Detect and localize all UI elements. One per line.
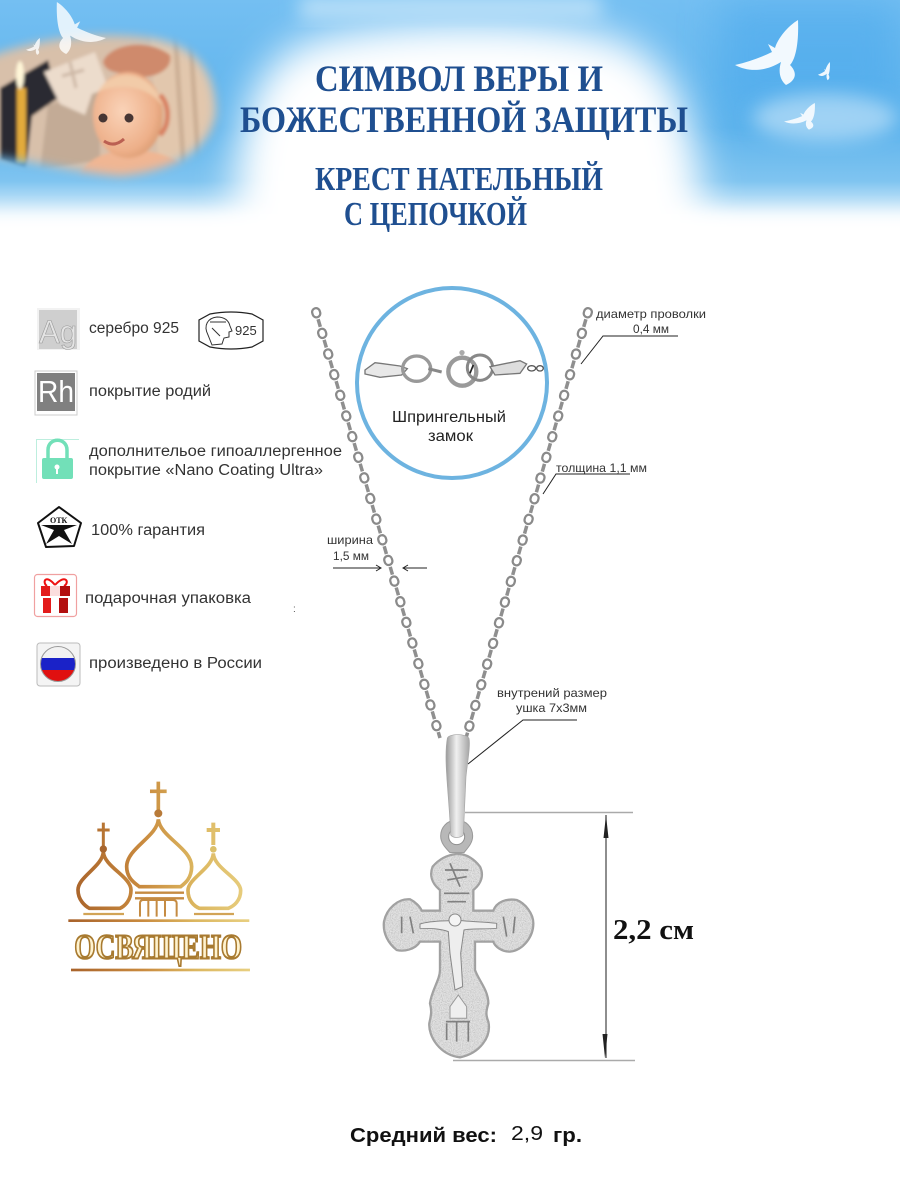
text: gift wrapping: подарочная упаковка [85,590,251,607]
cross pendant [384,735,533,1057]
logo: consecrated domes [68,782,250,971]
icon: green lock [36,440,79,483]
text: guarantee: 100% гарантия [91,522,205,539]
average weight: гр. [553,1125,582,1147]
cross body [384,854,533,1057]
title: БОЖЕСТВЕННОЙ ЗАЩИТЫ [240,99,688,141]
crosses [97,782,220,853]
dimension: cross height [453,812,694,1060]
bail [446,735,469,837]
drum and base line [68,893,249,922]
callout: chain width: 1,5 мм [333,549,369,563]
callout: chain width [327,533,427,571]
clasp caption: замок [428,428,474,445]
callout: chain width: ширина [327,533,373,547]
icon: rhodium Rh: Rh [38,374,74,409]
jump ring [441,820,473,853]
average weight [350,1123,582,1147]
photo: baptism of a baby [0,28,222,182]
icon: 925 hallmark [199,312,263,349]
text: silver 925: серебро 925 [89,320,179,337]
icon: faint dove over cloud [784,103,815,130]
icon: small dove top right [818,62,830,80]
underline [71,969,250,971]
title [240,59,688,141]
callout: bail inner size [468,686,607,764]
callout: wire diameter: 0,4 мм [633,322,669,336]
header sky background [0,0,900,274]
callout: wire diameter: диаметр проволки [596,307,706,321]
chain: right strand [466,312,588,738]
callout: wire diameter [581,307,706,364]
callout: thickness: толщина 1,1 мм [556,461,647,475]
crucifix figure [402,863,515,1042]
icon: gift box [34,574,76,616]
panel: spring clasp callout [357,288,547,478]
subtitle: КРЕСТ НАТЕЛЬНЫЙ [315,161,603,198]
subtitle: С ЦЕПОЧКОЙ [344,196,527,233]
icon: Russian flag button [37,643,80,686]
average weight: Средний вес: [350,1125,497,1147]
title: СИМВОЛ ВЕРЫ И [315,59,603,100]
icon: small dove top left [26,38,40,55]
icon: 925 hallmark: 925 [235,323,257,338]
text: made in Russia: произведено в России [89,655,262,672]
average weight: 2,9 [511,1123,543,1145]
chain: left strand [316,312,440,738]
text: nano coating: дополнительое гипоаллергенное [89,443,342,460]
text: nano coating: покрытие «Nano Coating Ultra» [89,462,323,479]
icon: large dove top right [735,20,798,85]
clasp caption [392,409,506,445]
logo wordmark: ОСВЯЩЕНО [74,928,242,966]
callout: bail inner size: внутрений размер [497,686,607,700]
domes [78,819,241,908]
text: rhodium coating: покрытие родий [89,383,211,400]
icon: large dove top left [57,2,106,54]
icon: OTK badge [38,507,81,547]
icon: silver Ag: Ag [39,314,77,350]
subtitle [315,161,603,233]
text: nano coating [89,443,342,479]
clasp drawing [365,350,543,386]
feature list [34,308,342,686]
callout: bail inner size: ушка 7х3мм [516,701,587,715]
callout: thickness [543,461,647,494]
stray colon: : [293,604,296,615]
clasp caption: Шпрингельный [392,409,506,426]
dimension: cross height: 2,2 см [613,915,694,946]
icon: OTK badge: ОТК [50,516,68,525]
